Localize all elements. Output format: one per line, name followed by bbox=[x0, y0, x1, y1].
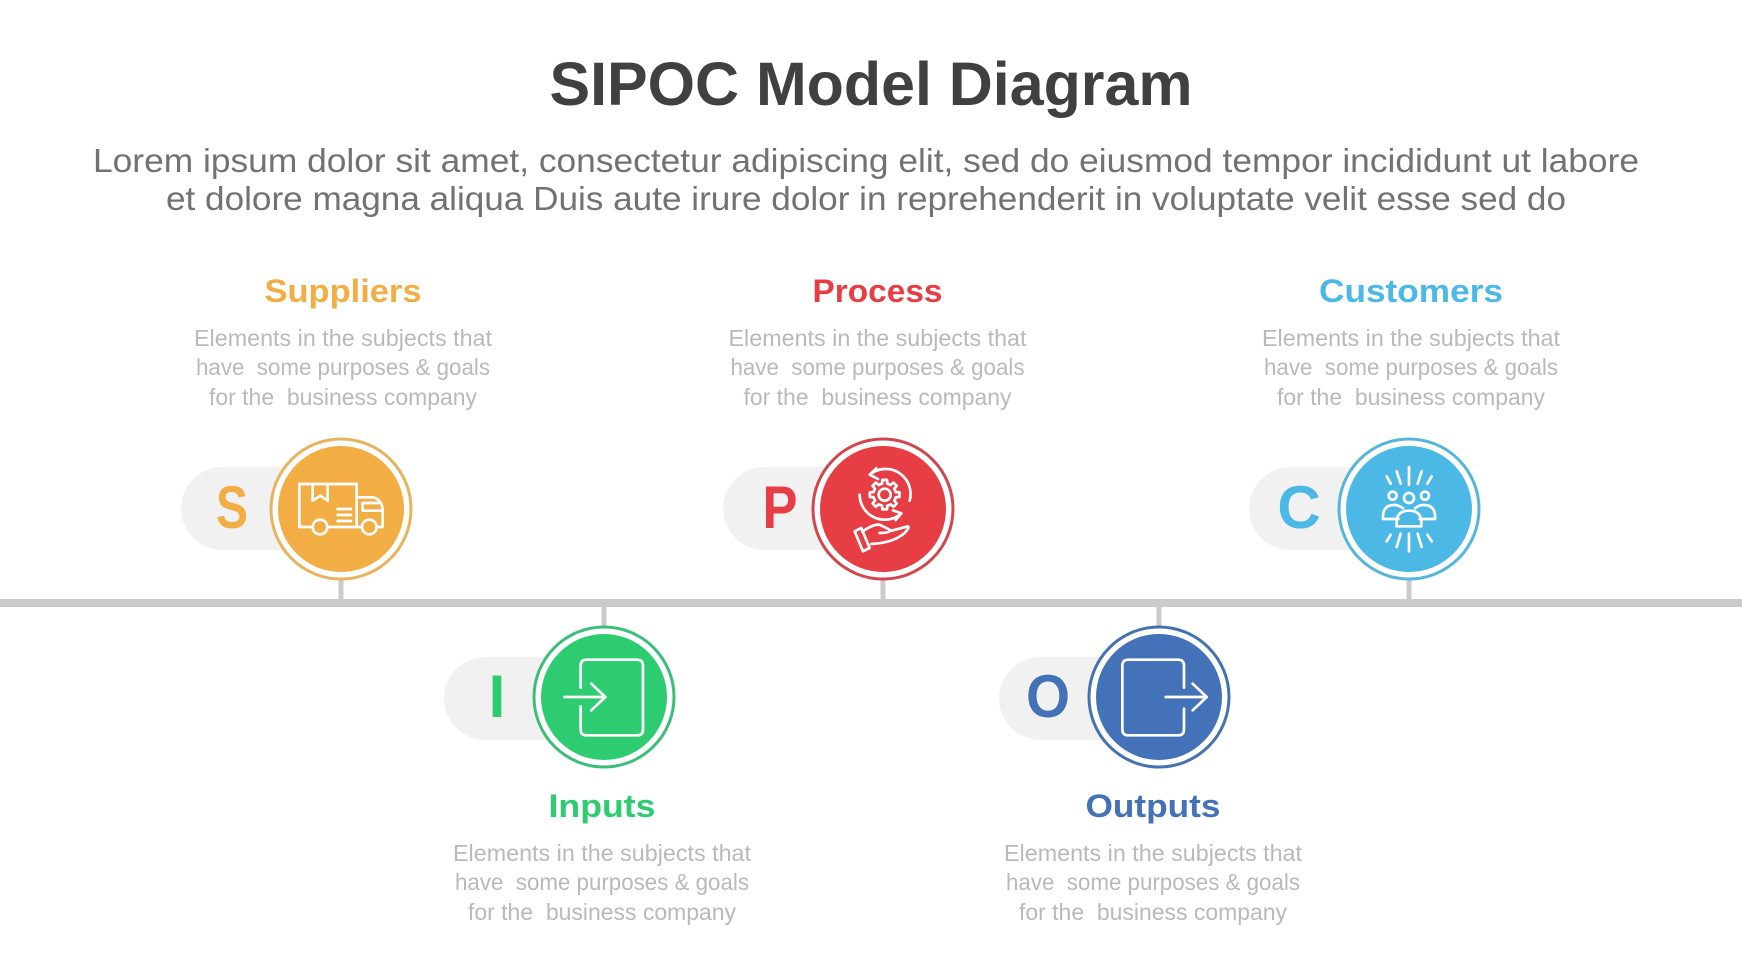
heading: suppliers: Suppliers bbox=[264, 273, 422, 309]
title: SIPOC Model Diagram bbox=[550, 50, 1192, 118]
icon: truck in circle bbox=[271, 439, 411, 579]
subtitle text block bbox=[93, 142, 1639, 217]
description: process: Elements in the subjects that bbox=[728, 325, 1027, 351]
letter pill: O bbox=[999, 657, 1169, 740]
heading: inputs: Inputs bbox=[548, 788, 656, 824]
description: customers: for the business company bbox=[1277, 384, 1545, 410]
description: outputs: for the business company bbox=[1019, 899, 1287, 925]
letter pill: O: O bbox=[1026, 663, 1070, 730]
letter pill: S: S bbox=[216, 474, 248, 541]
description: inputs bbox=[453, 840, 751, 925]
description: customers bbox=[1262, 325, 1560, 410]
description: process bbox=[728, 325, 1027, 410]
panel: outputs bbox=[999, 627, 1302, 925]
description: suppliers: for the business company bbox=[209, 384, 477, 410]
panel: suppliers bbox=[181, 273, 492, 579]
description: suppliers: Elements in the subjects that bbox=[194, 325, 492, 351]
description: inputs: for the business company bbox=[468, 899, 736, 925]
letter pill: P bbox=[723, 467, 893, 550]
description: customers: Elements in the subjects that bbox=[1262, 325, 1560, 351]
icon: gear and hand in circle bbox=[813, 439, 953, 579]
letter pill: I: I bbox=[489, 663, 505, 730]
description: suppliers bbox=[194, 325, 492, 410]
description: process: have some purposes & goals bbox=[730, 354, 1024, 380]
letter pill: I bbox=[444, 657, 614, 740]
description: suppliers: have some purposes & goals bbox=[196, 354, 490, 380]
icon: enter arrow in circle bbox=[534, 627, 674, 767]
description: inputs: have some purposes & goals bbox=[455, 869, 749, 895]
description: outputs bbox=[1004, 840, 1302, 925]
description: process: for the business company bbox=[744, 384, 1012, 410]
heading: outputs: Outputs bbox=[1086, 788, 1220, 824]
panel: customers bbox=[1249, 273, 1560, 579]
letter pill: P: P bbox=[762, 474, 798, 541]
letter pill: C: C bbox=[1277, 474, 1321, 541]
subtitle text block: et dolore magna aliqua Duis aute irure dolor in reprehenderit in voluptate velit esse sed do bbox=[166, 180, 1566, 217]
description: inputs: Elements in the subjects that bbox=[453, 840, 751, 866]
description: outputs: Elements in the subjects that bbox=[1004, 840, 1302, 866]
heading: process: Process bbox=[812, 273, 942, 309]
letter pill: S bbox=[181, 467, 351, 550]
letter pill: C bbox=[1249, 467, 1419, 550]
description: outputs: have some purposes & goals bbox=[1006, 869, 1300, 895]
timeline axis with connectors bbox=[0, 575, 1742, 630]
heading: customers: Customers bbox=[1319, 273, 1503, 309]
panel: process bbox=[723, 273, 1027, 579]
panel: inputs bbox=[444, 627, 751, 925]
icon: exit arrow in circle bbox=[1089, 627, 1229, 767]
icon: people group in circle bbox=[1339, 439, 1479, 579]
subtitle text block: Lorem ipsum dolor sit amet, consectetur adipiscing elit, sed do eiusmod tempor incididunt ut labore bbox=[93, 142, 1639, 179]
description: customers: have some purposes & goals bbox=[1264, 354, 1558, 380]
